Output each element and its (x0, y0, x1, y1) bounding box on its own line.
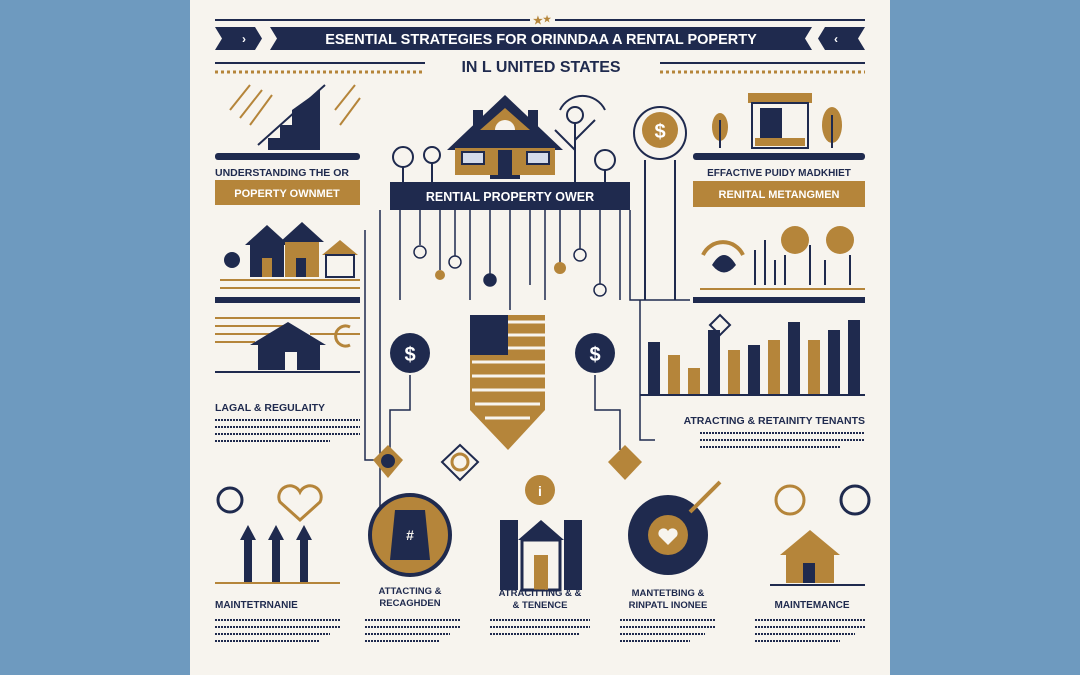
divider bar right top (693, 153, 865, 160)
text block: tenants (700, 433, 865, 447)
label: property owner gold box (215, 180, 360, 205)
icon: dollar coin top right: $ (654, 121, 666, 143)
bottom labels: MANTETBING & (632, 588, 705, 599)
label: rental management gold box: RENITAL METANGMEN (718, 189, 840, 201)
divider bar left top (215, 153, 360, 160)
title banner (215, 27, 865, 50)
bottom labels: ATTACTING & (379, 586, 442, 597)
icon: dollar circle left: $ (404, 344, 416, 366)
label: property owner gold box: POPERTY OWNMET (234, 188, 340, 200)
icon: house columns (500, 475, 582, 590)
icon: house columns: i (538, 483, 542, 499)
icon: right house spiral (770, 486, 869, 585)
icon: dollar circle left (390, 333, 430, 373)
panel: main cream sheet (190, 0, 890, 675)
icon: stars: ★ (543, 14, 552, 24)
icon: lamps and tree (393, 96, 615, 182)
text blocks bottom (215, 620, 865, 641)
icon: staircase chart top left (230, 85, 360, 150)
icon: compass circle (370, 495, 450, 575)
icon: dollar coin top right (634, 107, 686, 300)
icon: shop and trees (712, 93, 842, 148)
text block: legal (215, 420, 360, 441)
heading: effective: EFFACTIVE PUIDY MADKHIET (707, 168, 851, 179)
icon: central house (447, 95, 563, 179)
heading: legal & regulatory: LAGAL & REGULAITY (215, 402, 325, 414)
heading: attracting tenants: ATRACTING & RETAINITY TENANTS (684, 415, 865, 427)
bottom labels: ATRACITTING & & (499, 588, 581, 599)
bottom labels: RINPATL INONEE (629, 600, 707, 611)
divider bar right mid (693, 297, 865, 303)
icon: compass circle: # (406, 527, 414, 543)
icon: house with stripes (215, 318, 360, 372)
bottom labels: MAINTEMANCE (774, 600, 850, 611)
icon: stars: ★ (533, 15, 543, 27)
title banner: › (242, 32, 246, 46)
divider bar left mid (215, 297, 360, 303)
icon: dollar circle right: $ (589, 344, 601, 366)
heading: understanding: UNDERSTANDING THE OR (215, 167, 349, 179)
icon: left houses (220, 222, 360, 288)
bottom labels: RECAGHDEN (379, 598, 441, 609)
bottom labels (215, 586, 850, 611)
icon: flag shield (470, 315, 545, 450)
title banner: ‹ (834, 32, 838, 46)
subtitle: IN L UNITED STATES (461, 59, 621, 76)
label: rental property owner navy box (390, 182, 630, 210)
panel: bottom maintenance icon (215, 486, 340, 583)
connector lines with nodes (365, 210, 690, 520)
icon: right mid icons (700, 226, 865, 289)
bottom labels: & TENENCE (513, 600, 567, 611)
title banner: ESENTIAL STRATEGIES FOR ORINNDAA A RENTAL POPERTY (325, 32, 757, 48)
icon: dollar circle right (575, 333, 615, 373)
icon: heart wheel (628, 482, 720, 575)
bar chart (640, 315, 865, 395)
label: rental property owner navy box: RENTIAL PROPERTY OWER (426, 190, 594, 204)
icon: stars (533, 14, 552, 27)
label: rental management gold box (693, 181, 865, 207)
bottom labels: MAINTETRNANIE (215, 600, 298, 611)
row icons: diamonds (373, 445, 642, 480)
